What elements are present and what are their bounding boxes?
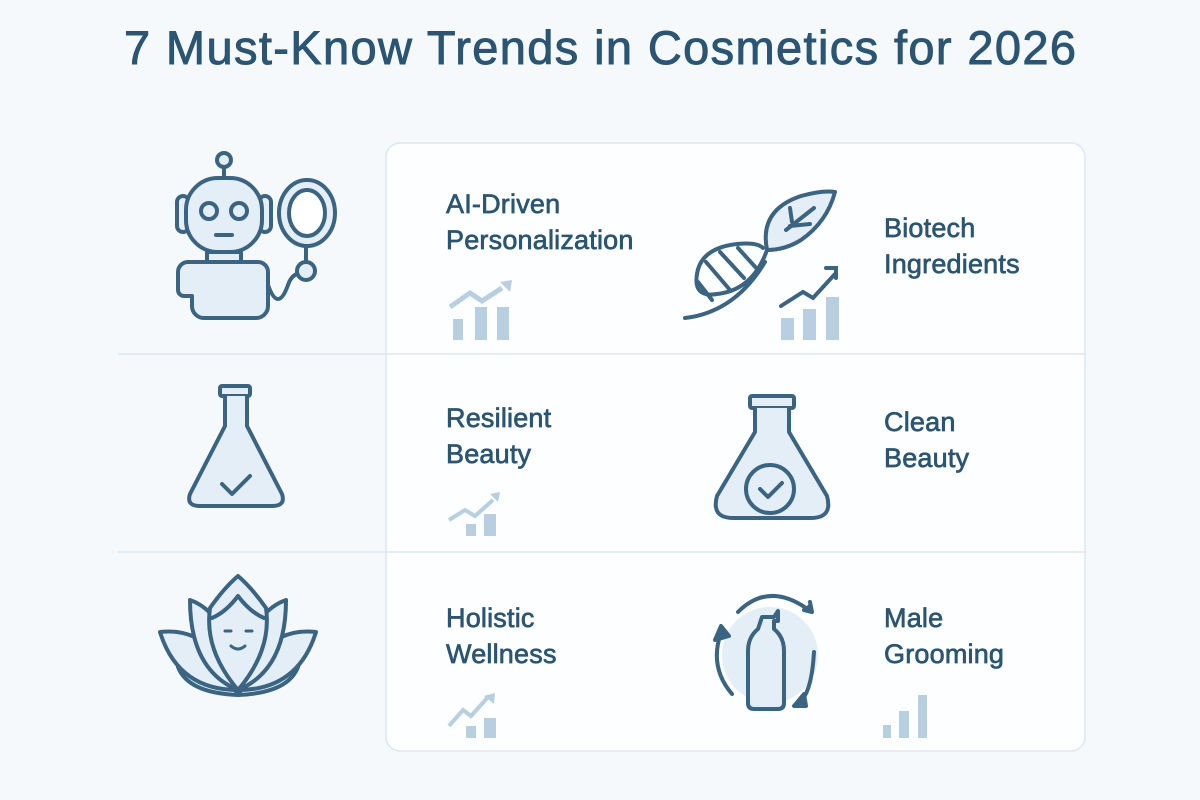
text: AI-Driven Personalization: Personalization [446,225,634,255]
chart icon 1 [450,280,512,340]
text: Male Grooming: Male [884,603,943,633]
chart icon 5 [883,695,927,738]
icon: lotus face [160,576,316,695]
text: Biotech Ingredients: Biotech [884,213,975,243]
icon: robot with mirror [177,153,335,318]
icon: clean beauty flask [716,396,828,518]
text: AI-Driven Personalization: AI-Driven [446,189,560,219]
icon: bottle with cycle arrows [715,596,818,709]
chart icon 2 [781,297,839,340]
icon: DNA leaf [685,192,835,318]
chart icon 3 [449,492,500,536]
text: Holistic Wellness: Wellness [446,639,557,669]
panel: trends card [386,143,1085,751]
text: Biotech Ingredients: Ingredients [884,249,1020,279]
text: Holistic Wellness: Holistic [446,603,535,633]
text: Resilient Beauty: Beauty [446,439,532,469]
icon: flask with check [189,386,283,506]
text: Clean Beauty: Beauty [884,443,970,473]
text: Resilient Beauty: Resilient [446,403,552,433]
chart icon 4 [449,693,496,738]
text: Male Grooming: Grooming [884,639,1004,669]
title: 7 Must-Know Trends in Cosmetics for 2026 [124,21,1076,74]
text: Clean Beauty: Clean [884,407,956,437]
